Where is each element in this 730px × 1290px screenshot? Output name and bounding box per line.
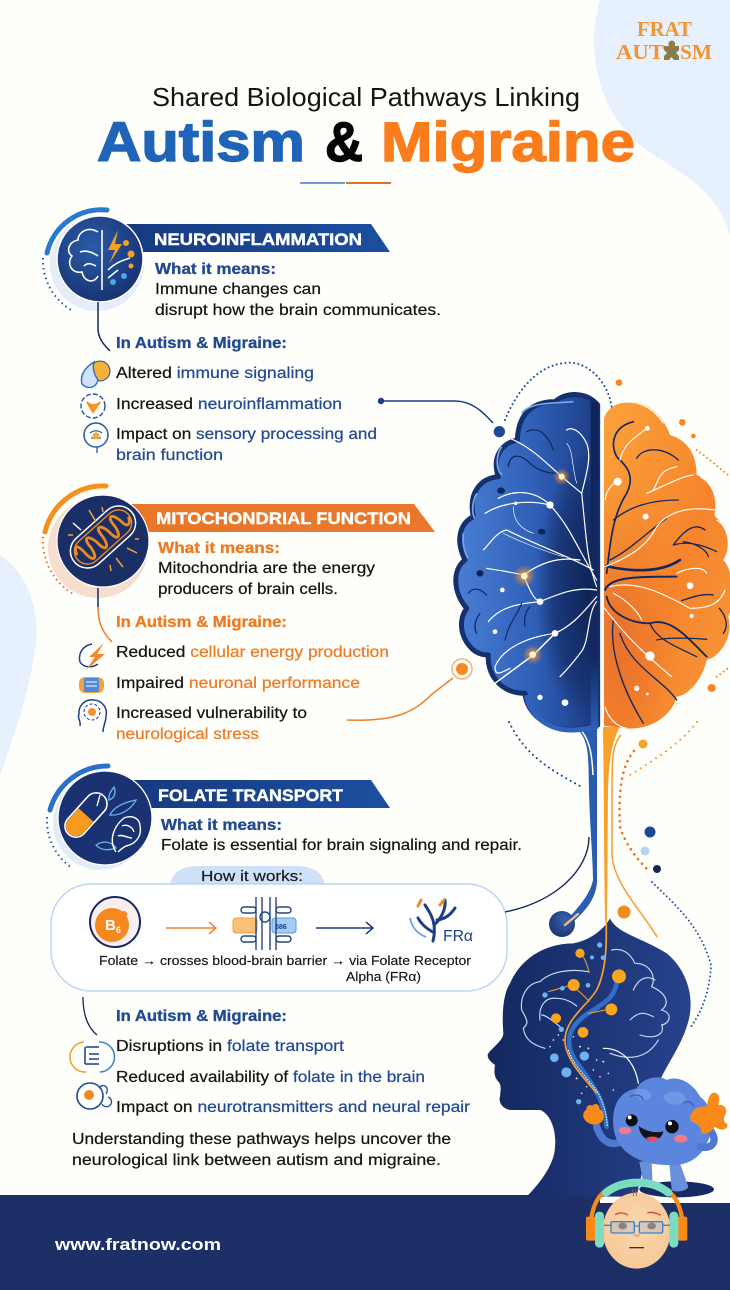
list text: Increased neuroinflammation (116, 396, 342, 413)
icon: blood-brain barrier (233, 897, 296, 950)
right hemisphere (603, 402, 730, 728)
left arm and hand (597, 1127, 620, 1144)
what it means (158, 540, 375, 598)
icon: mitochondrion (43, 486, 149, 598)
what it means: What it means: (161, 817, 282, 834)
mouth (629, 1246, 644, 1250)
banner title: FOLATE TRANSPORT (158, 786, 344, 805)
face (619, 1114, 687, 1143)
blue nodes (542, 942, 605, 1104)
panel: mitochondrial function (43, 486, 435, 743)
panel: folate transport (47, 766, 522, 1116)
blue stream (569, 980, 617, 1127)
left hemisphere (456, 395, 598, 730)
dotted curves near stems (509, 722, 711, 1028)
avatar: man with headphones (586, 1183, 687, 1269)
orange nodes (551, 949, 626, 1038)
closing statement: neurological link between autism and migraine. (72, 1152, 441, 1169)
connector: neuroinflammation to brain (378, 398, 493, 423)
list text: Impact on sensory processing and (116, 426, 377, 443)
caption: Folate → crosses blood-brain barrier → via Folate Receptor (99, 954, 471, 968)
caption (99, 954, 471, 984)
white nerve branches (603, 428, 725, 677)
legs (639, 1162, 688, 1191)
how it works tab (170, 866, 325, 885)
logo: FRAT AUTISM (616, 17, 712, 64)
logo: FRAT AUTISM: AUT (616, 40, 664, 64)
list text: Impaired neuronal performance (116, 675, 360, 692)
what it means: What it means: (155, 261, 276, 278)
what it means (161, 817, 522, 854)
closing statement: Understanding these pathways helps uncover the (72, 1131, 451, 1148)
connector stem (98, 588, 112, 642)
hair tuft (632, 1189, 637, 1196)
list text: neurological stress (116, 726, 259, 743)
footer url: www.fratnow.com (54, 1236, 221, 1254)
title ampersand: & (325, 110, 363, 173)
icon: folate receptor alpha: FRα (443, 928, 473, 945)
body (613, 1077, 712, 1165)
icon: folate receptor alpha (410, 900, 473, 945)
subheading: In Autism & Migraine: (116, 335, 287, 352)
puzzle piece (690, 1093, 727, 1134)
list text (116, 644, 389, 743)
subheading: In Autism & Migraine: (116, 614, 287, 631)
subheading: In Autism & Migraine: (116, 1008, 287, 1025)
illustration: head silhouette (488, 900, 691, 1197)
brows (615, 1212, 661, 1215)
headphone band (590, 1189, 683, 1237)
what it means: What it means: (158, 540, 280, 557)
icon: capsule and leaves (47, 766, 152, 870)
connector: mitochondria to brain (347, 659, 472, 720)
list text: Altered immune signaling (116, 365, 314, 382)
icon: B6 (90, 897, 140, 947)
list text: Disruptions in folate transport (116, 1038, 345, 1055)
brain connector node (493, 425, 506, 438)
shadow (639, 1181, 714, 1197)
connector stem (98, 302, 110, 351)
title word: Migraine: Migraine (381, 110, 635, 173)
list icons (70, 1042, 115, 1109)
panel: neuroinflammation (43, 210, 441, 464)
closing statement (72, 1131, 451, 1169)
white nerve branches (483, 429, 597, 683)
footer band (0, 1195, 730, 1290)
how it works box (51, 884, 507, 991)
connector: folate to stem (505, 837, 589, 912)
title line one: Shared Biological Pathways Linking (152, 82, 580, 112)
ear cups (595, 1212, 604, 1248)
list text: Increased vulnerability to (116, 705, 307, 722)
decorative dots near stems (618, 740, 661, 918)
banner (130, 780, 390, 808)
stems linking brain and head (549, 727, 657, 937)
dotted orbit lines (505, 363, 730, 677)
brain outline (521, 949, 669, 1083)
list icons (81, 361, 110, 453)
banner title: NEUROINFLAMMATION (154, 230, 362, 249)
icon: blood-brain barrier: 586 (275, 924, 287, 931)
eyes (618, 1223, 627, 1229)
logo: FRAT AUTISM: SM (680, 40, 712, 64)
icon: brain with lightning (43, 210, 144, 311)
background blob: left (0, 555, 37, 775)
icon: B6: 6 (116, 925, 121, 935)
what it means: Mitochondria are the energy (158, 560, 375, 577)
silhouette (488, 918, 691, 1197)
glowing nodes (493, 426, 694, 706)
title word: Autism: Autism (97, 110, 305, 173)
arrow (166, 922, 216, 934)
what it means: Immune changes can (155, 281, 321, 298)
right arm (700, 1130, 714, 1147)
navy nerve branches (605, 422, 726, 723)
what it means: disrupt how the brain communicates. (155, 302, 441, 319)
connector stem (83, 997, 97, 1035)
orange nerve (565, 900, 606, 1093)
orange accent dots (616, 379, 716, 692)
banner title: MITOCHONDRIAL FUNCTION (156, 509, 411, 528)
what it means: producers of brain cells. (158, 581, 338, 598)
title (97, 82, 635, 173)
list icons (78, 643, 106, 732)
arrow (316, 922, 373, 934)
icon: B6: B (105, 917, 116, 934)
banner (125, 224, 390, 252)
how it works tab: How it works: (201, 868, 303, 885)
list text: brain function (116, 447, 223, 464)
nose (633, 1234, 640, 1237)
title underline (300, 182, 391, 184)
list text (116, 1038, 470, 1116)
list text (116, 365, 377, 464)
what it means: Folate is essential for brain signaling and repair. (161, 837, 522, 854)
head (603, 1193, 671, 1269)
dark vein accents (468, 430, 557, 640)
what it means (155, 261, 441, 319)
glasses (604, 1222, 670, 1233)
illustration: split brain (456, 363, 730, 730)
white particles (549, 1034, 614, 1094)
list text: Impact on neurotransmitters and neural repair (116, 1099, 470, 1116)
list text: Reduced cellular energy production (116, 644, 389, 661)
caption: Alpha (FRα) (346, 970, 421, 984)
logo: FRAT AUTISM: FRAT (637, 17, 692, 41)
background blob: top right (594, 0, 730, 235)
list text: Reduced availability of folate in the brain (116, 1069, 425, 1086)
mascot: brain character (583, 1077, 727, 1197)
banner (130, 504, 435, 532)
